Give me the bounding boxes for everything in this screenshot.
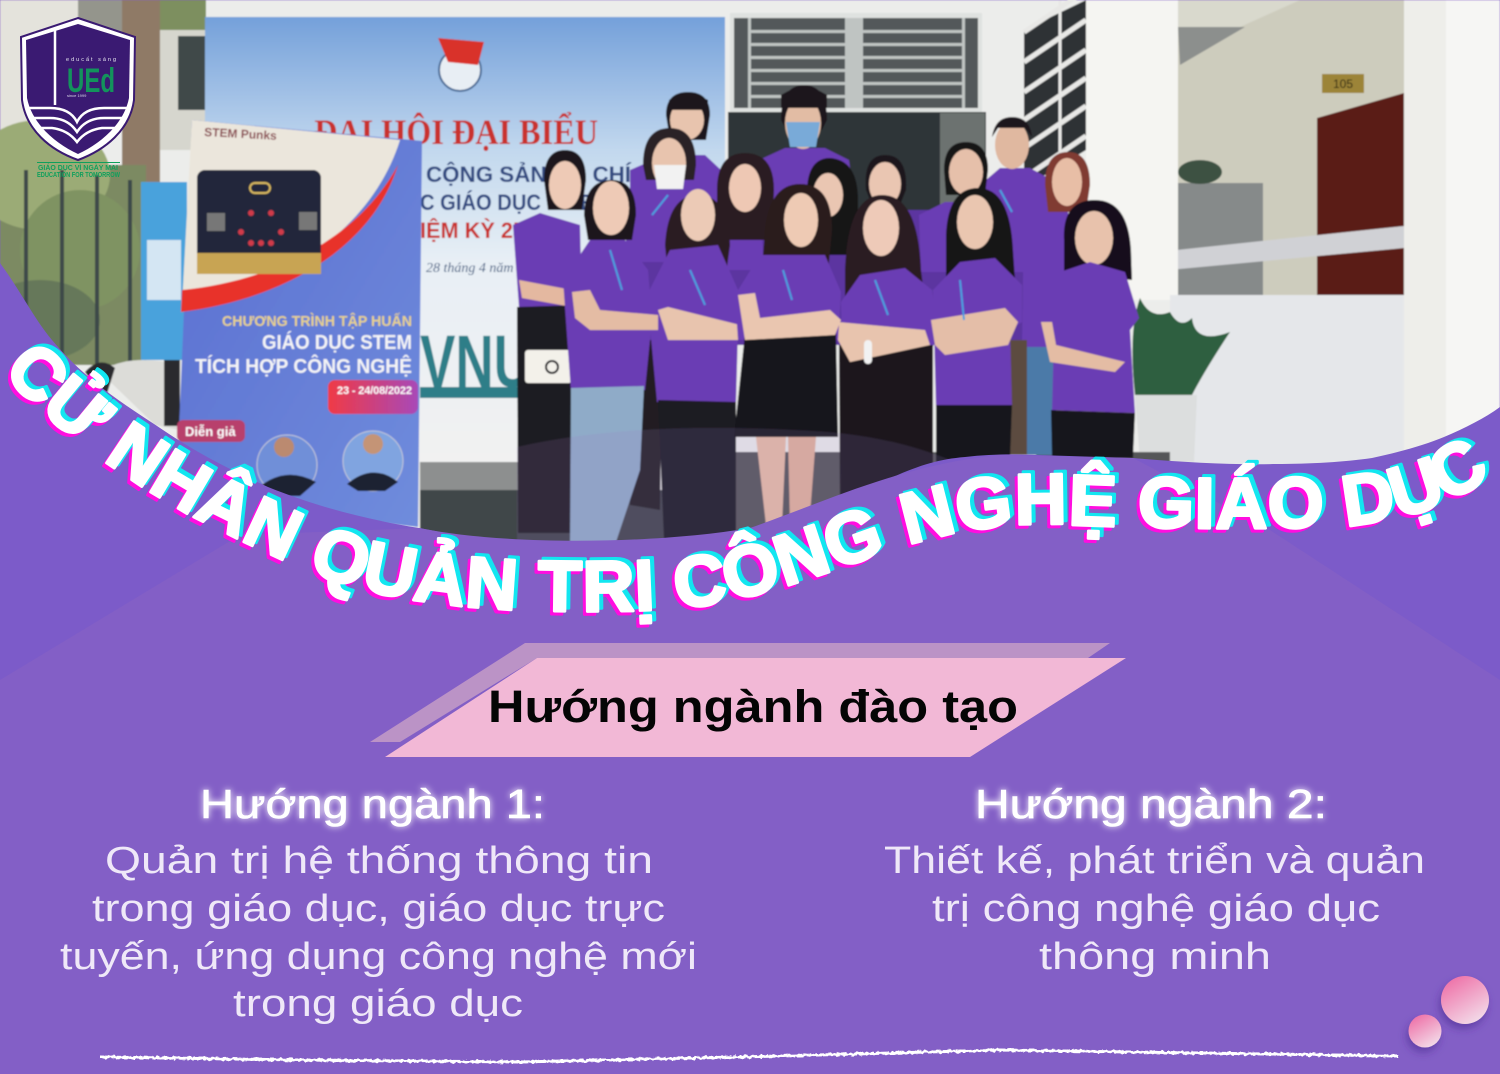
major 2 description: thông minh [1039,936,1271,978]
text block: major 2 [884,781,1425,978]
logo slogan: EDUCATION FOR TOMORROW [37,172,120,179]
major 1 description: trong giáo dục [233,983,523,1025]
banner heading: ĐẠI HỘI ĐẠI BIỂU [314,112,598,152]
panel: purple wave background [0,263,1500,1074]
training poster: STEM Punks [204,125,277,143]
plant [1132,298,1230,395]
brush stroke line [100,1050,1398,1062]
panel: group photo background [0,0,1500,560]
section banner: Hướng ngành đào tạo [370,643,1126,757]
back row [513,85,1090,533]
logo slogan [37,162,120,179]
speaker label: Diễn giả [185,424,236,439]
banner lines [420,162,632,243]
logo: UEd shield: educất sáng [66,57,116,63]
back centre students [866,155,906,206]
logo: UEd shield: since 1999 [67,93,87,98]
students group [513,85,1139,545]
room number sign [1322,74,1364,93]
backing behind the group [626,210,1030,345]
front student in jeans [563,180,658,545]
louvre [1024,0,1086,178]
title white layer: CỬ NHÂN QUẢN TRỊ CÔNG NGHỆ GIÁO DỤC [11,346,1486,625]
major 1 description: tuyến, ứng dụng công nghệ mới [60,936,697,978]
centre student in skirt [734,184,841,525]
poster text: CHƯƠNG TRÌNH TẬP HUẤN [222,312,412,330]
speaker portraits [257,431,403,496]
VNU sign: VNU [420,320,532,403]
banner lines: IỆM KỲ 25 [420,218,525,243]
front student right centre [931,188,1022,462]
text block: major 1 [60,781,697,1025]
title cyan layer: CỬ NHÂN QUẢN TRỊ CÔNG NGHỆ GIÁO DỤC [24,344,1490,622]
translucent wave overlay [517,428,950,560]
section banner: Hướng ngành đào tạo: Hướng ngành đào tạo [488,681,1018,732]
red-haired student [1009,152,1090,455]
front student with wavy hair [838,195,938,502]
banner lines: CỘNG SẢN HỒ CHÍ [426,162,632,187]
decorative pink circles [1408,976,1489,1048]
front student left centre [647,189,740,540]
major 1 description [60,840,697,1025]
poster text: TÍCH HỢP CÔNG NGHỆ [195,354,412,378]
blue mask student [757,85,855,205]
major 2 heading: Hướng ngành 2: [975,781,1327,827]
handbag [525,350,572,383]
congress banner: 28 tháng 4 năm [426,261,514,276]
window grille [730,13,982,113]
ground [420,398,520,458]
major 2 description: Thiết kế, phát triển và quản [884,840,1425,882]
door [1317,93,1404,298]
foliage and fence [0,165,146,365]
major 1 description: trong giáo dục, giáo dục trực [92,888,665,930]
congress banner [205,17,725,462]
front right student [1041,200,1139,458]
logo: UEd shield [21,18,135,179]
major 1 description: Quản trị hệ thống thông tin [105,840,653,882]
bags [100,360,180,430]
major 1 heading: Hướng ngành 1: [200,781,545,827]
speaker label [177,420,245,442]
left back student [513,150,586,533]
major 2 description: trị công nghệ giáo dục [932,888,1380,930]
columns and lower wall [1086,0,1178,300]
banner emblem [438,38,484,91]
microbit board [197,170,321,274]
date badge: 23 - 24/08/2022 [337,385,412,397]
room interior [1178,0,1404,298]
training poster [176,120,422,527]
title magenta layer: CỬ NHÂN QUẢN TRỊ CÔNG NGHỆ GIÁO DỤC [8,356,1477,628]
building backdrop [0,0,1500,560]
logo slogan: GIÁO DỤC VÌ NGÀY MAI [38,163,118,172]
logo: UEd shield: UEd [67,62,115,100]
back right student [986,117,1056,240]
room number sign: 105 [1333,77,1353,91]
major 2 description [884,840,1425,978]
poster text: GIÁO DỤC STEM [262,331,412,354]
poster text [195,312,412,378]
side poster [141,182,187,360]
back student white mask [630,92,724,262]
lanyards [610,190,1012,320]
balcony rail [1158,226,1404,271]
banner lines: C GIÁO DỤC VÀ ĐÀO [420,190,625,215]
doorway [728,112,986,252]
date badge [328,380,418,414]
title: curved heading [8,344,1490,628]
